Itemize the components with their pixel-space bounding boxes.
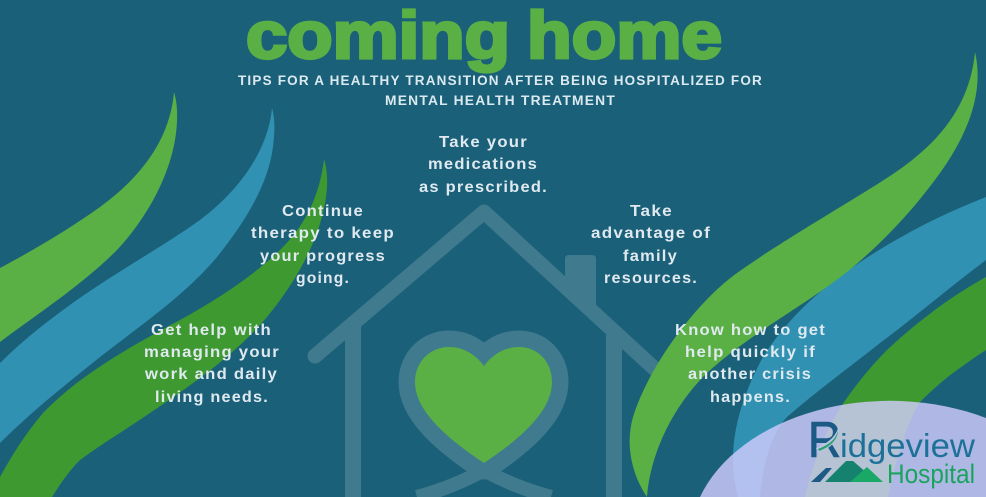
tip: family resources bbox=[591, 203, 711, 287]
tip: medications: Take your bbox=[439, 134, 528, 151]
right swooshes bbox=[630, 52, 986, 497]
tip: crisis: happens. bbox=[710, 389, 791, 406]
logo: Ridgeview Hospital: idgeview bbox=[840, 427, 975, 464]
subtitle bbox=[238, 73, 763, 108]
tip: therapy: Continue bbox=[282, 203, 364, 220]
tip: crisis: Know how to get bbox=[675, 322, 826, 339]
tip: medications: medications bbox=[428, 156, 538, 173]
tip: therapy bbox=[251, 203, 395, 287]
title bbox=[246, 0, 722, 72]
tip: family resources: Take bbox=[630, 203, 673, 220]
logo: Ridgeview Hospital bbox=[808, 412, 975, 489]
tip: medications bbox=[419, 134, 548, 196]
tip: crisis: another crisis bbox=[688, 366, 812, 383]
logo: Ridgeview Hospital: Hospital bbox=[887, 459, 975, 489]
icon: heart with ribbon outline bbox=[415, 347, 552, 497]
tip: daily living: managing your bbox=[144, 344, 280, 361]
tip: family resources: family bbox=[623, 248, 678, 265]
tip: daily living bbox=[144, 322, 280, 406]
tip: therapy: therapy to keep bbox=[251, 225, 395, 242]
tip: crisis: help quickly if bbox=[685, 344, 816, 361]
tip: family resources: advantage of bbox=[591, 225, 711, 242]
tip: family resources: resources. bbox=[604, 270, 698, 287]
tip: medications: as prescribed. bbox=[419, 179, 548, 196]
subtitle: TIPS FOR A HEALTHY TRANSITION AFTER BEING HOSPITALIZED FOR bbox=[238, 73, 763, 88]
left swooshes bbox=[0, 92, 327, 497]
title: home bbox=[527, 0, 722, 72]
tip: crisis bbox=[675, 322, 826, 406]
logo: Ridgeview Hospital: R bbox=[808, 412, 841, 468]
tip: therapy: your progress bbox=[260, 248, 386, 265]
subtitle: MENTAL HEALTH TREATMENT bbox=[385, 93, 616, 108]
tip: daily living: Get help with bbox=[151, 322, 272, 339]
tip: therapy: going. bbox=[296, 270, 350, 287]
tip: daily living: living needs. bbox=[155, 389, 269, 406]
title: coming bbox=[246, 0, 510, 72]
tip: daily living: work and daily bbox=[144, 366, 278, 383]
logo badge background bbox=[700, 401, 986, 497]
icon: house outline with chimney bbox=[315, 212, 655, 497]
